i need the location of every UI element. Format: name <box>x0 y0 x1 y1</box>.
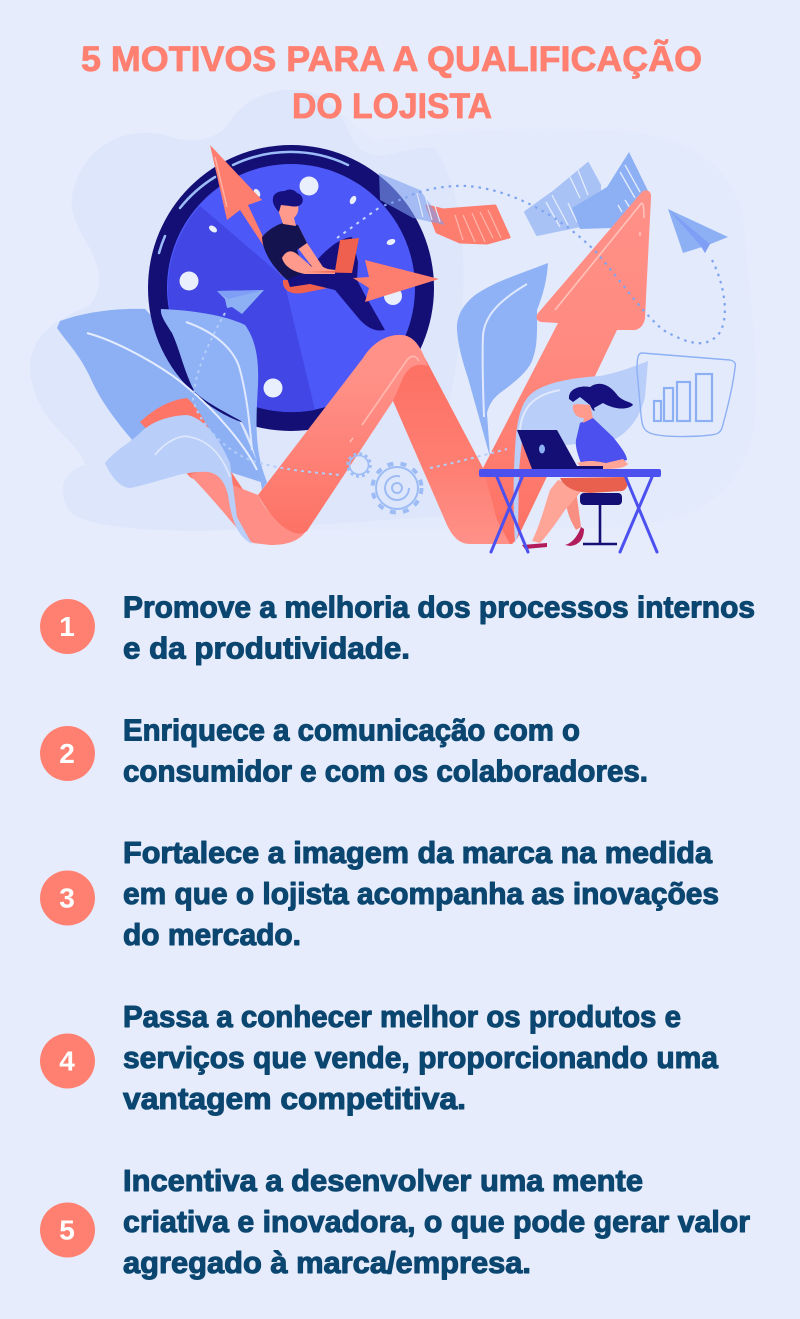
badge 2: 2 <box>59 738 75 769</box>
badge 1: 1 <box>59 611 75 642</box>
text 3: do mercado. <box>123 917 301 952</box>
text 5: criativa e inovadora, o que pode gerar valor <box>123 1204 750 1239</box>
text 4: Passa a conhecer melhor os produtos e <box>123 999 681 1034</box>
text 3 <box>123 835 719 952</box>
text 2: consumidor e com os colaboradores. <box>123 754 648 788</box>
text 1: Promove a melhoria dos processos internos <box>123 590 755 624</box>
text 1: e da produtividade. <box>123 630 410 666</box>
text 4 <box>123 999 719 1116</box>
paper blue 3 <box>572 152 650 229</box>
text 3: em que o lojista acompanha as inovações <box>123 876 719 911</box>
dotted flight path <box>380 186 725 343</box>
second left leaf <box>87 309 267 490</box>
woman at desk <box>479 384 661 552</box>
paper red <box>427 206 509 243</box>
man with laptop <box>262 190 385 331</box>
item 1 <box>40 590 755 666</box>
paper blue 2 <box>525 163 600 235</box>
text 5: agregado à marca/empresa. <box>123 1245 531 1280</box>
badge 4 <box>40 1034 95 1088</box>
pale front leaf <box>105 415 252 544</box>
title <box>81 40 702 126</box>
paper plane, left <box>217 290 264 314</box>
text 4: vantagem competitiva. <box>123 1081 466 1116</box>
badge 5: 5 <box>59 1214 75 1246</box>
chart box <box>637 353 735 437</box>
item 2 <box>40 712 648 788</box>
large left leaf <box>57 309 267 484</box>
text 5 <box>123 1163 750 1280</box>
badge 2 <box>40 726 95 781</box>
text 3: Fortalece a imagem da marca na medida <box>123 835 713 870</box>
badge 3: 3 <box>59 882 75 914</box>
red arrow right <box>353 260 439 302</box>
title: 5 MOTIVOS PARA A QUALIFICAÇÃO <box>81 40 702 79</box>
paper translucent <box>379 173 445 225</box>
badge 1 <box>40 599 95 654</box>
centre leaf <box>457 263 548 457</box>
text 2 <box>123 712 648 788</box>
badge 5 <box>40 1202 95 1258</box>
text 2: Enriquece a comunicação com o <box>123 712 580 748</box>
dotted ground line <box>193 313 507 475</box>
item 5 <box>40 1163 750 1280</box>
pale leaf behind woman <box>514 361 648 543</box>
gears <box>348 454 422 512</box>
text 1 <box>123 590 755 666</box>
badge 4: 4 <box>59 1046 75 1076</box>
title: DO LOJISTA <box>292 87 492 126</box>
paper plane, right <box>668 209 728 253</box>
text 4: serviços que vende, proporcionando uma <box>123 1040 719 1075</box>
text 5: Incentiva a desenvolver uma mente <box>123 1163 643 1198</box>
illustration <box>57 145 735 552</box>
red arrow up <box>210 145 282 277</box>
background blob <box>30 90 756 531</box>
item 4 <box>40 999 719 1116</box>
badge 3 <box>40 870 95 926</box>
item 3 <box>40 835 719 952</box>
clock <box>148 145 434 431</box>
ribbon arrow <box>140 190 651 545</box>
